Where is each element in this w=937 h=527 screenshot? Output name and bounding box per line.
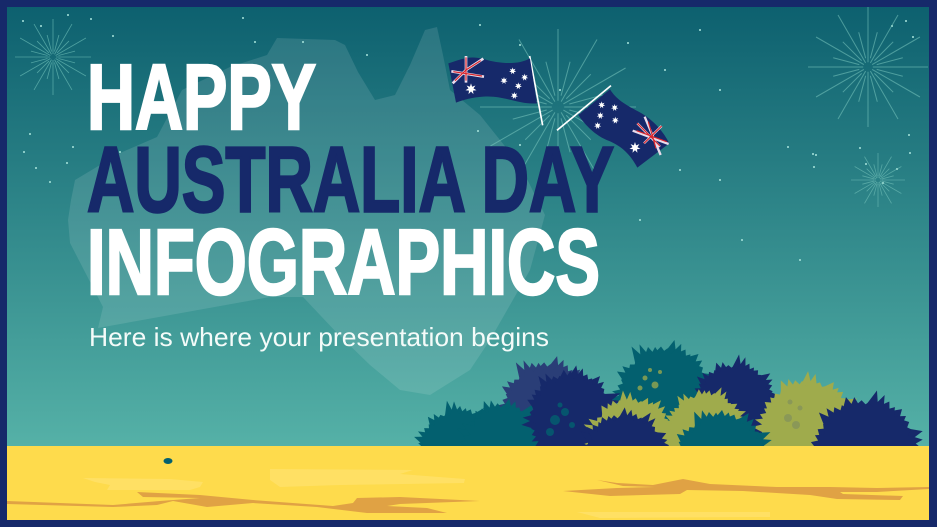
firework: top right — [808, 7, 928, 127]
bush: olive mid — [666, 387, 746, 444]
dune shadow: right — [563, 479, 929, 500]
leaf texture: teal on navy — [546, 402, 575, 436]
firework: top left — [15, 19, 91, 95]
bushes — [414, 340, 923, 446]
firework: small right — [851, 153, 905, 207]
bush: dark teal mid left — [476, 398, 538, 446]
dune shadow: left — [7, 492, 480, 513]
title line: happy: HAPPY — [87, 45, 316, 149]
flag cloth — [448, 58, 537, 104]
bush: faded navy back — [499, 356, 584, 412]
small teal rock — [164, 458, 172, 464]
title line: australia day: AUSTRALIA DAY — [87, 128, 614, 232]
bush: navy mid — [522, 366, 620, 446]
union jack — [451, 56, 484, 83]
bush: olive right — [755, 371, 857, 446]
bush: dark teal top — [612, 340, 709, 421]
flag: left — [448, 56, 543, 125]
subtitle: Here is where your presentation begins — [89, 322, 549, 352]
bush: navy right front — [811, 390, 923, 446]
bush texture: olive right — [784, 400, 802, 429]
light sand patches — [83, 469, 770, 518]
starry dots — [22, 14, 914, 261]
australia map silhouette — [68, 27, 545, 395]
flag pole — [557, 86, 611, 130]
stars — [594, 101, 640, 153]
leaf texture: olive on teal — [638, 368, 662, 390]
bush: teal front — [676, 410, 772, 446]
firework: behind flags — [480, 29, 636, 185]
title line: infographics: INFOGRAPHICS — [87, 210, 600, 314]
flag: right — [557, 86, 669, 168]
bush: olive left — [584, 390, 674, 446]
bush: navy lower mid filler — [545, 425, 580, 446]
sand ground — [0, 446, 937, 520]
flag pole — [530, 56, 543, 125]
flag cloth — [578, 89, 669, 168]
bush: dark teal far left — [414, 401, 484, 446]
union jack — [633, 117, 669, 155]
bush: navy front — [586, 408, 669, 446]
bush: navy right back — [694, 354, 775, 433]
stars — [466, 67, 528, 99]
title — [87, 45, 614, 314]
